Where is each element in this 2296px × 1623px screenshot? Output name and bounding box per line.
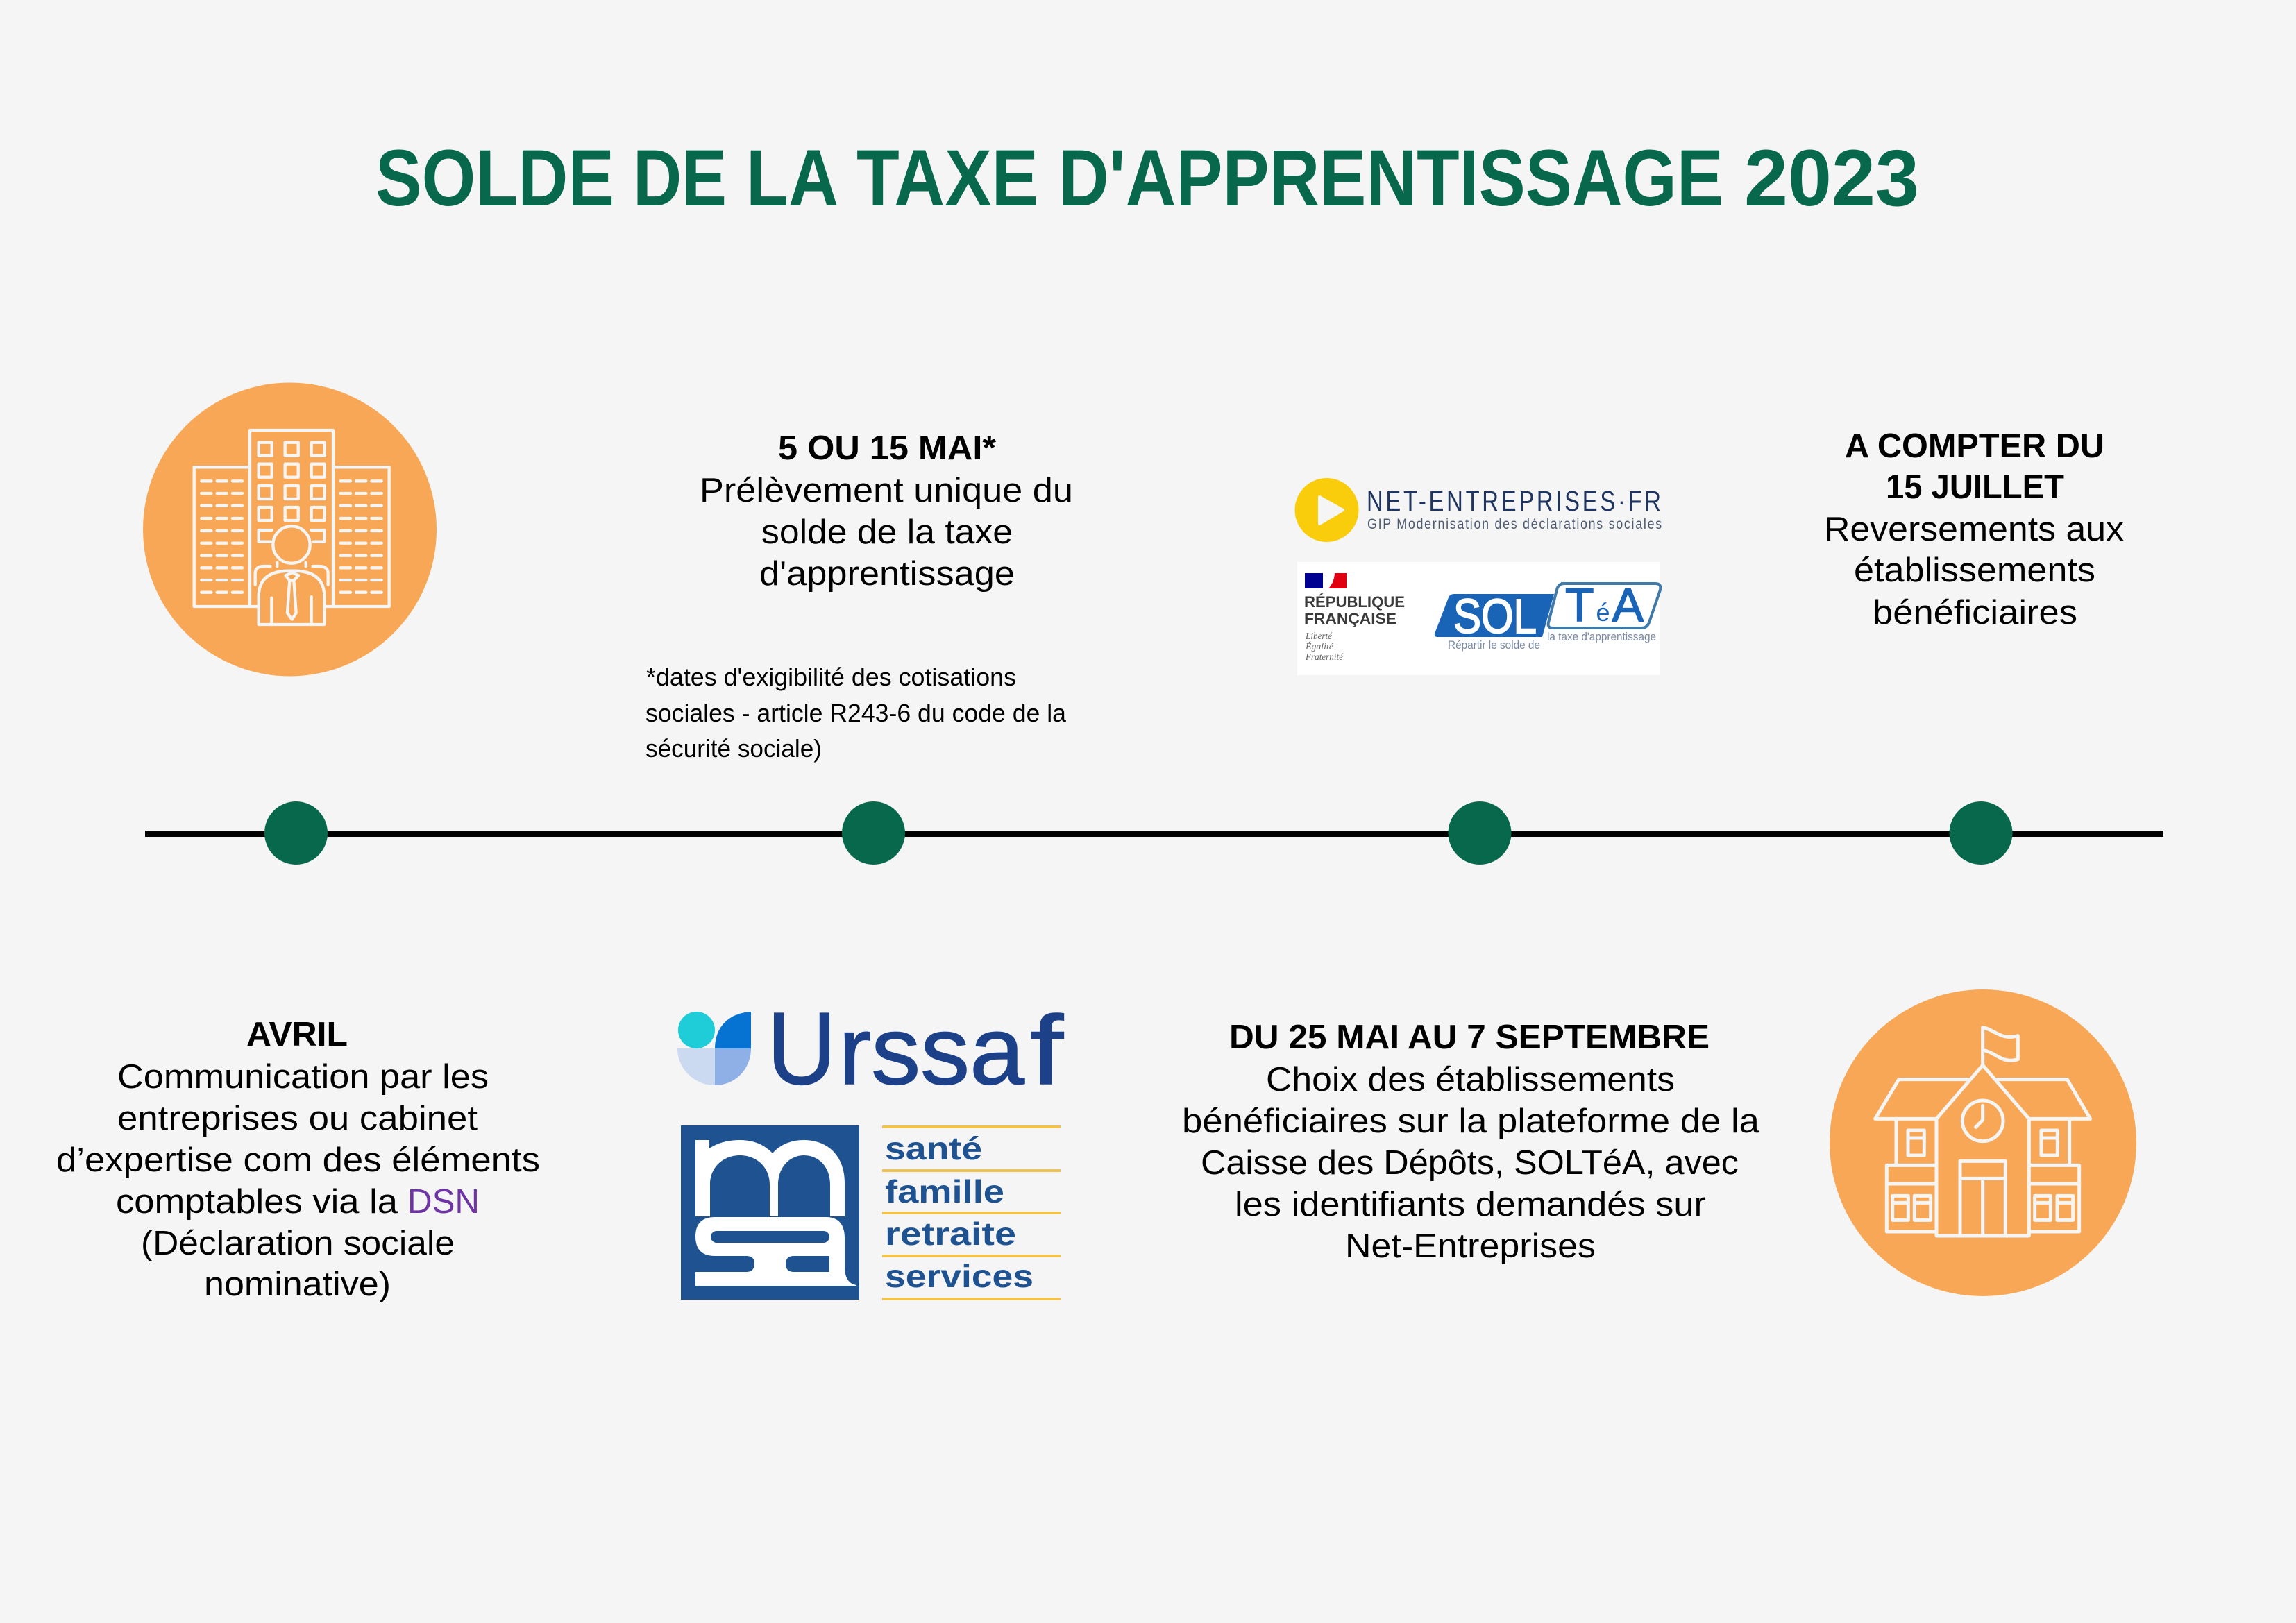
text block: 5 ou 15 mai [700,430,1073,593]
logo: république française and SOLTéA: FRANÇAISE [1304,610,1396,627]
logo: république française and SOLTéA: la taxe d'apprentissage [1547,630,1656,643]
timeline [145,801,2163,865]
icon: school building [1830,989,2136,1296]
heading: a compter du 15 juillet: 15 JUILLET [1886,468,2064,506]
icon: french flag [1305,573,1347,588]
logo: république française and SOLTéA: SOL [1453,589,1537,643]
heading: avril: AVRIL [246,1016,348,1053]
title: LA [746,134,838,223]
body: communication [56,1058,540,1303]
logo: msa: retraite [885,1216,1016,1252]
heading: 5 ou 15 mai: 5 OU 15 MAI* [778,430,997,467]
logo: république française and SOLTéA: RÉPUBLIQUE [1304,593,1405,611]
icon: company building with employee [143,383,437,676]
logo: urssaf: rssa [838,997,1025,1105]
logo: msa [681,1125,1061,1300]
body: communication: DSN [407,1183,480,1221]
logo: urssaf [677,992,1064,1106]
logo: net-entreprises: GIP Modernisation des déclarations sociales [1367,516,1662,532]
body: communication: Communication par les [117,1058,489,1096]
title: DE [633,134,727,223]
footnote: sécurité sociale) [645,734,822,763]
body: reversements: établissements [1854,552,2095,589]
logo: république française and SOLTéA: TéA [1565,579,1644,631]
logo: urssaf: f [1030,995,1064,1105]
body: communication: (Déclaration sociale [141,1225,455,1262]
heading: du 25 mai au 7 septembre: DU 25 MAI AU 7 SEPTEMBRE [1229,1019,1710,1056]
logo: république française and SOLTéA: Égalité [1305,640,1334,652]
title: D'APPRENTISSAGE [1058,134,1723,223]
title [375,134,1919,223]
timeline dot: plateforme [1448,801,1512,865]
footnote: sociales - article R243-6 du code de la [645,699,1067,727]
body: prélèvement: d'apprentissage [759,555,1015,593]
logo: urssaf: U [767,992,836,1106]
logo: msa: famille [885,1173,1004,1209]
body: prélèvement: solde de la taxe [761,513,1013,551]
logo: république française and SOLTéA: Fraternité [1305,652,1344,663]
body: prélèvement: Prélèvement unique du [700,472,1073,509]
title: SOLDE [375,134,614,223]
body: choix des établissements: les identifiants demandés sur [1235,1186,1706,1223]
logo: msa: santé [885,1130,982,1166]
body: choix des établissements [1182,1061,1760,1265]
body: reversements: bénéficiaires [1873,594,2077,631]
body: reversements: Reversements aux [1824,511,2124,548]
footnote: *dates d'exigibilité des cotisations [646,663,1016,691]
logo: net-entreprises [1295,478,1662,542]
timeline dot: juillet [1949,801,2013,865]
body: choix des établissements: bénéficiaires sur la plateforme de la [1182,1103,1760,1140]
heading: a compter du 15 juillet [1845,427,2104,506]
logo: net-entreprises: NET-ENTREPRISES·FR [1367,484,1661,517]
body: communication: entreprises ou cabinet [117,1100,478,1137]
body: choix des établissements: Choix des établissements [1266,1061,1675,1098]
body: communication: nominative) [204,1266,391,1303]
timeline dot: mai [842,801,905,865]
logo: république française and SOLTéA: Liberté [1305,631,1333,642]
title: 2023 [1744,134,1919,223]
body: reversements [1824,511,2124,631]
footnote [645,663,1067,763]
logo: république française and SOLTéA [1297,562,1660,675]
text block: a compter du 15 juillet [1824,427,2124,631]
body: communication: comptables via la [116,1183,398,1221]
title: TAXE [856,134,1038,223]
body: prélèvement [700,472,1073,593]
text block: du 25 mai au 7 septembre [1182,1019,1760,1265]
body: choix des établissements: Net-Entreprises [1345,1227,1596,1265]
text block: avril [56,1016,540,1303]
timeline dot: avril [264,801,328,865]
heading: a compter du 15 juillet: A COMPTER DU [1845,427,2104,465]
logo: république française and SOLTéA: Répartir le solde de [1448,638,1540,652]
logo: msa: services [885,1258,1033,1294]
body: communication: d’expertise com des éléments [56,1141,540,1179]
body: choix des établissements: Caisse des Dépôts, SOLTéA, avec [1201,1144,1739,1182]
